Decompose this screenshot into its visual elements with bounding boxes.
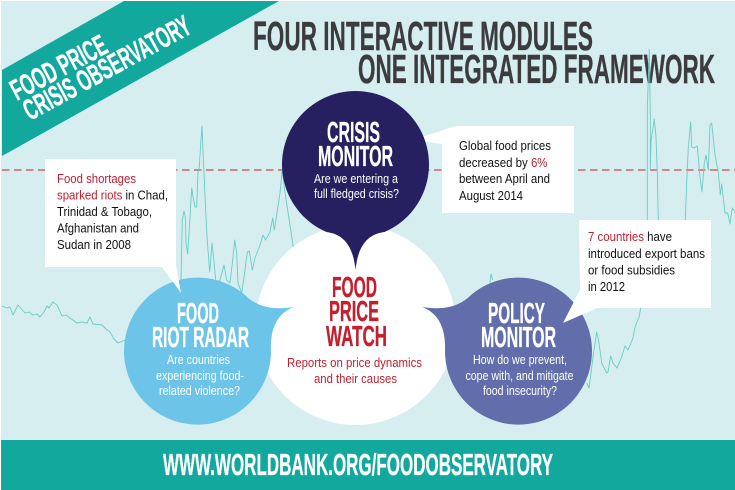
module: food riot radar: Are countries bbox=[167, 353, 230, 367]
module: crisis monitor: CRISIS bbox=[327, 117, 380, 149]
module: policy monitor: MONITOR bbox=[481, 322, 556, 354]
module: food riot radar: FOOD bbox=[177, 298, 219, 330]
callout: export bans: in 2012 bbox=[588, 280, 625, 294]
module: food riot radar: experiencing food- bbox=[156, 369, 244, 383]
callout: food riots: Food shortages bbox=[57, 172, 136, 186]
module: food riot radar bbox=[124, 278, 294, 425]
module: policy monitor: POLICY bbox=[488, 298, 545, 330]
ribbon: food price crisis observatory bbox=[2, 1, 279, 156]
callout: food riots: Trinidad & Tobago, bbox=[57, 205, 152, 219]
callout: global food prices: decreased by 6% bbox=[459, 156, 548, 170]
module: food riot radar: RIOT RADAR bbox=[152, 322, 249, 354]
chart: food price index line bbox=[2, 49, 735, 388]
module: food price watch: and their causes bbox=[314, 372, 397, 386]
footer banner with url bbox=[1, 440, 735, 490]
title bbox=[253, 13, 715, 92]
callout: global food prices: Global food prices bbox=[459, 139, 551, 153]
module: policy monitor: food insecurity? bbox=[483, 384, 557, 398]
module: policy monitor: How do we prevent, bbox=[473, 353, 567, 367]
callout: global food prices: between April and bbox=[459, 172, 550, 186]
callout: export bans: introduced export bans bbox=[588, 247, 705, 261]
module: crisis monitor: MONITOR bbox=[318, 141, 393, 173]
module: policy monitor bbox=[422, 278, 597, 425]
callout: export bans: or food subsidies bbox=[588, 264, 675, 278]
callout: export bans bbox=[563, 220, 711, 323]
callout: food riots bbox=[45, 159, 181, 293]
module: food price watch: Reports on price dynamics bbox=[287, 356, 422, 370]
module: crisis monitor: full fledged crisis? bbox=[314, 187, 399, 201]
module: food riot radar: related violence? bbox=[159, 384, 240, 398]
module: food price watch: FOOD bbox=[332, 272, 377, 304]
callout: food riots: sparked riots in Chad, bbox=[57, 188, 168, 202]
callout: export bans: 7 countries have bbox=[588, 230, 672, 244]
module: food price watch: PRICE bbox=[329, 296, 379, 328]
callout: food riots: Afghanistan and bbox=[57, 222, 139, 236]
callout: global food prices: August 2014 bbox=[459, 189, 523, 203]
module: food price watch bbox=[256, 225, 456, 425]
module: policy monitor: cope with, and mitigate bbox=[466, 369, 574, 383]
callout: food riots: Sudan in 2008 bbox=[57, 238, 131, 252]
module: crisis monitor bbox=[282, 91, 429, 270]
module: food price watch: WATCH bbox=[326, 321, 387, 353]
callout: global food prices bbox=[412, 126, 574, 213]
callout tail over riot radar bbox=[162, 266, 181, 293]
module: crisis monitor: Are we entering a bbox=[314, 172, 398, 186]
